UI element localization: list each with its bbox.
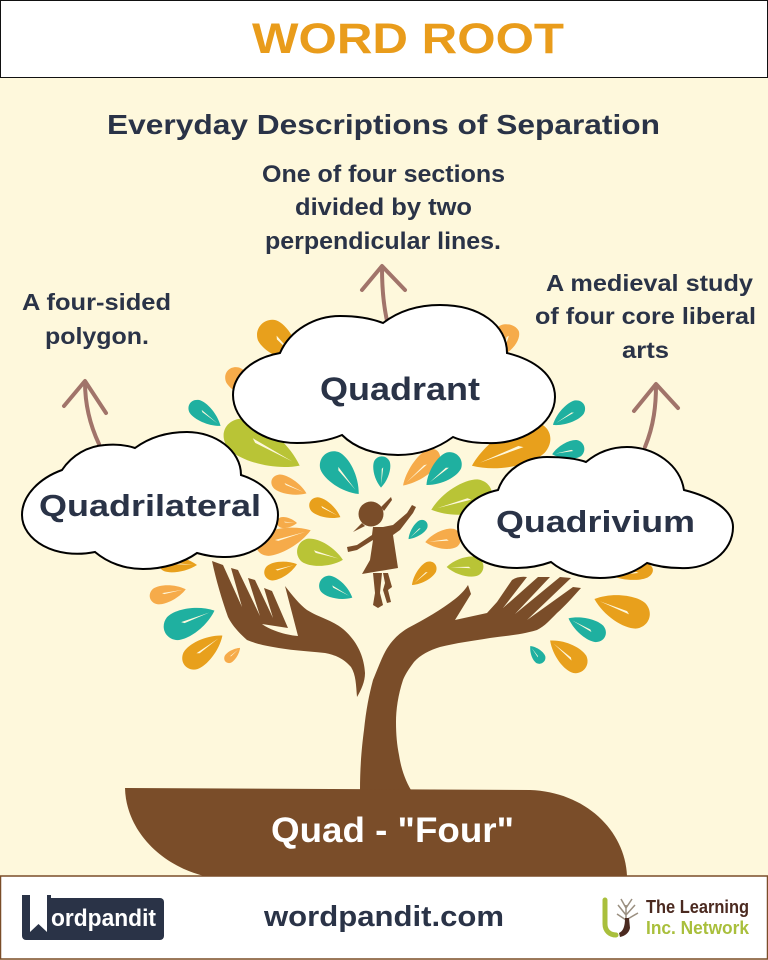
definition: quadrilateral: polygon. xyxy=(45,323,149,349)
cloud: quadrilateral xyxy=(22,432,278,569)
section heading: Everyday Descriptions of Separation xyxy=(107,109,660,140)
cloud: quadrivium xyxy=(458,447,733,578)
logo: the learning inc network: Inc. Network xyxy=(646,918,750,938)
cloud label: Quadrilateral xyxy=(39,488,261,523)
logo: the learning inc network: The Learning xyxy=(646,897,749,917)
definition: quadrant xyxy=(262,161,505,255)
definition: quadrilateral: A four-sided xyxy=(22,289,171,315)
definition: quadrant: perpendicular lines. xyxy=(265,228,501,255)
definition: quadrivium: A medieval study xyxy=(546,270,753,296)
tree foliage leaves xyxy=(148,314,654,678)
logo: wordpandit: ordpandit xyxy=(51,905,156,932)
cloud: quadrant xyxy=(233,305,555,455)
arrow: to quadrilateral definition xyxy=(64,381,106,444)
website address: wordpandit.com xyxy=(263,901,504,933)
left hand branch xyxy=(212,561,365,697)
root label: Quad - "Four" xyxy=(271,811,514,850)
arrow: to quadrivium definition xyxy=(634,384,678,447)
title: WORD ROOT xyxy=(252,15,564,63)
cloud label: Quadrant xyxy=(320,371,480,407)
definition: quadrant: One of four sections xyxy=(262,161,505,188)
arrow: to quadrant definition xyxy=(362,266,405,325)
icon: jumping child silhouette xyxy=(347,497,416,608)
ground mound xyxy=(125,788,627,876)
definition: quadrivium: arts xyxy=(622,337,669,363)
right hand branch and trunk xyxy=(360,577,581,790)
footer bar xyxy=(0,876,768,959)
logo: the learning inc network xyxy=(605,897,750,938)
cloud label: Quadrivium xyxy=(496,504,695,539)
definition: quadrant: divided by two xyxy=(295,194,472,221)
logo: wordpandit xyxy=(22,895,164,940)
definition: quadrivium xyxy=(535,270,756,363)
definition: quadrilateral xyxy=(22,289,171,349)
header banner xyxy=(0,0,768,78)
definition: quadrivium: of four core liberal xyxy=(535,303,756,329)
